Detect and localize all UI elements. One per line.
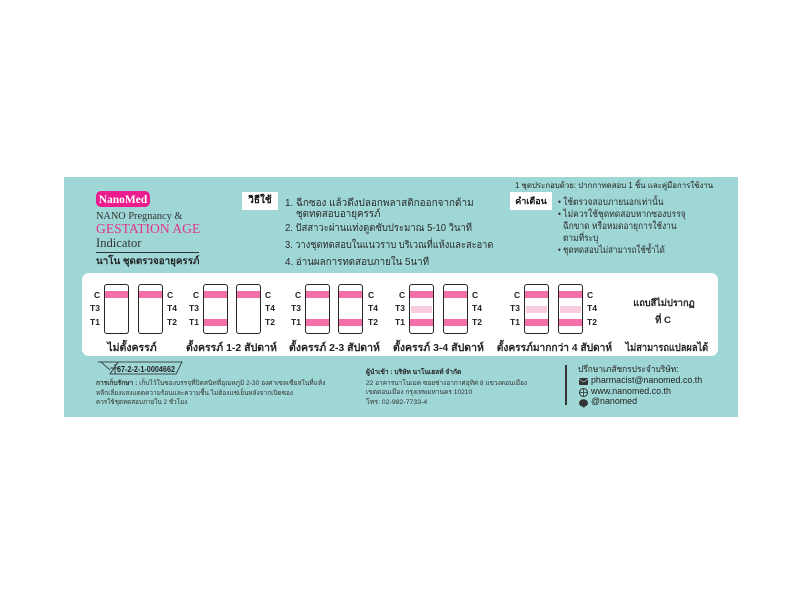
contact heading: ปรึกษาเภสัชกรประจำบริษัท: (578, 364, 679, 374)
at C text: ที่ C (655, 315, 671, 326)
label T4: T4 (265, 303, 275, 313)
storage line 2: หลีกเลี่ยงแสงแดดความร้อนและความชื้น ไม่ต้องแช่เย็นหลังจากเปิดซอง (96, 390, 293, 396)
step 2: 2. ปัสสาวะผ่านแท่งดูดซับประมาณ 5-10 วินาที (285, 223, 472, 234)
step 4: 4. อ่านผลการทดสอบภายใน 5นาที (285, 257, 429, 268)
icon: web (579, 388, 588, 397)
label C right: C (167, 290, 173, 300)
text block: importer (366, 368, 527, 406)
label C left: C (94, 290, 100, 300)
no band text: แถบสีไม่ปรากฏ (633, 298, 695, 309)
strip right (338, 284, 363, 334)
warning 2 line 3: ตามที่ระบุ (563, 233, 598, 243)
label T1: T1 (291, 317, 301, 327)
label C left: C (295, 290, 301, 300)
label C right: C (472, 290, 478, 300)
address 1: 22 อาคารนาโนเมด ซอยช่างอากาศอุทิศ 8 แขวงดอนเมือง (366, 380, 527, 387)
strip right (236, 284, 261, 334)
label T1: T1 (189, 317, 199, 327)
result: 1-2 weeks (186, 284, 277, 354)
result: 3-4 weeks (393, 284, 484, 354)
strip right (558, 284, 583, 334)
caption: ตั้งครรภ์ 3-4 สัปดาห์ (393, 342, 484, 354)
label T2: T2 (368, 317, 378, 327)
phone: โทร: 02-982-7733-4 (366, 399, 427, 406)
caption: ไม่สามารถแปลผลได้ (626, 342, 708, 354)
label C left: C (399, 290, 405, 300)
warning 3: • ชุดทดสอบไม่สามารถใช้ซ้ำได้ (558, 245, 665, 255)
label T3: T3 (189, 303, 199, 313)
strip right (443, 284, 468, 334)
step 1: 1. ฉีกซอง แล้วดึงปลอกพลาสติกออกจากด้าม (285, 198, 474, 209)
strip left (409, 284, 434, 334)
tag: warning (510, 192, 552, 210)
label T2: T2 (265, 317, 275, 327)
caption: ตั้งครรภ์ 2-3 สัปดาห์ (289, 342, 380, 354)
result: more than 4 weeks (497, 284, 612, 354)
result: 2-3 weeks (289, 284, 380, 354)
label C left: C (514, 290, 520, 300)
label C right: C (587, 290, 593, 300)
label C left: C (193, 290, 199, 300)
title: product name (96, 211, 200, 267)
storage line 1: การเก็บรักษา : เก็บไว้ในซองบรรจุที่ปิดสนิทที่อุณหภูมิ 2-30 องศาเซลเซียสในที่แห้ง (96, 380, 325, 387)
label T4: T4 (368, 303, 378, 313)
strip left (524, 284, 549, 334)
email: pharmacist@nanomed.co.th (591, 375, 702, 385)
label T3: T3 (395, 303, 405, 313)
label C right: C (368, 290, 374, 300)
caption: ตั้งครรภ์มากกว่า 4 สัปดาห์ (497, 342, 612, 354)
caption: ไม่ตั้งครรภ์ (107, 342, 157, 354)
label T2: T2 (167, 317, 177, 327)
badge: registration number (98, 362, 183, 374)
warning 2 line 2: ฉีกขาด หรือหมดอายุการใช้งาน (563, 221, 677, 231)
website: www.nanomed.co.th (591, 386, 671, 396)
label T4: T4 (587, 303, 597, 313)
logo: NanoMed: NanoMed (99, 194, 147, 206)
panel: teal background (64, 177, 738, 417)
text block: contact (578, 364, 702, 408)
importer name: ผู้นำเข้า : บริษัท นาโนเฮลท์ จำกัด (366, 369, 461, 376)
tag: warning: คำเตือน (515, 196, 547, 206)
divider: contact (565, 365, 566, 405)
strip left (104, 284, 129, 334)
label T1: T1 (510, 317, 520, 327)
badge: registration number: 67-2-2-1-0004662 (117, 365, 175, 374)
warning 1: • ใช้ตรวจสอบภายนอกเท่านั้น (558, 197, 663, 207)
strip left (305, 284, 330, 334)
label T1: T1 (395, 317, 405, 327)
caption: ตั้งครรภ์ 1-2 สัปดาห์ (186, 342, 277, 354)
label T3: T3 (510, 303, 520, 313)
icon: email (579, 378, 588, 385)
result: not pregnant (90, 284, 177, 354)
text block: warnings (558, 195, 686, 256)
label T3: T3 (90, 303, 100, 313)
logo: NanoMed (96, 191, 150, 207)
title line: NANO Pregnancy: NANO Pregnancy & (96, 211, 182, 222)
text block: storage (96, 378, 325, 406)
warning 2: • ไม่ควรใช้ชุดทดสอบหากซองบรรจุ (558, 209, 686, 219)
label T3: T3 (291, 303, 301, 313)
text block: instructions (285, 197, 493, 268)
label T4: T4 (167, 303, 177, 313)
strip left (203, 284, 228, 334)
divider line (96, 252, 199, 253)
text: kit contents: 1 ชุดประกอบด้วย: ปากกาทดสอบ 1 ชิ้น และคู่มือการใช้งาน (515, 181, 713, 190)
title line: GESTATION AGE: GESTATION AGE (96, 221, 200, 236)
address 2: เขตดอนเมือง กรุงเทพมหานคร 10210 (366, 389, 472, 396)
tag: how to use: วิธีใช้ (248, 195, 272, 206)
strip right (138, 284, 163, 334)
panel: results (82, 273, 718, 356)
label T4: T4 (472, 303, 482, 313)
step 3: 3. วางชุดทดสอบในแนวราบ บริเวณที่แห้งและสะอาด (285, 240, 493, 251)
step 1 continued: ชุดทดสอบอายุครรภ์ (296, 209, 380, 220)
result: invalid (624, 297, 708, 354)
tag: how to use (242, 192, 278, 210)
label C right: C (265, 290, 271, 300)
label T2: T2 (472, 317, 482, 327)
title line: Indicator: Indicator (96, 236, 141, 250)
title line: Thai product name: นาโน ชุดตรวจอายุครรภ์ (96, 256, 199, 267)
line id: @nanomed (591, 396, 637, 406)
storage line 3: ควรใช้ชุดทดสอบภายใน 2 ชั่วโมง (96, 399, 187, 406)
icon: line chat (579, 399, 588, 408)
label T1: T1 (90, 317, 100, 327)
label T2: T2 (587, 317, 597, 327)
